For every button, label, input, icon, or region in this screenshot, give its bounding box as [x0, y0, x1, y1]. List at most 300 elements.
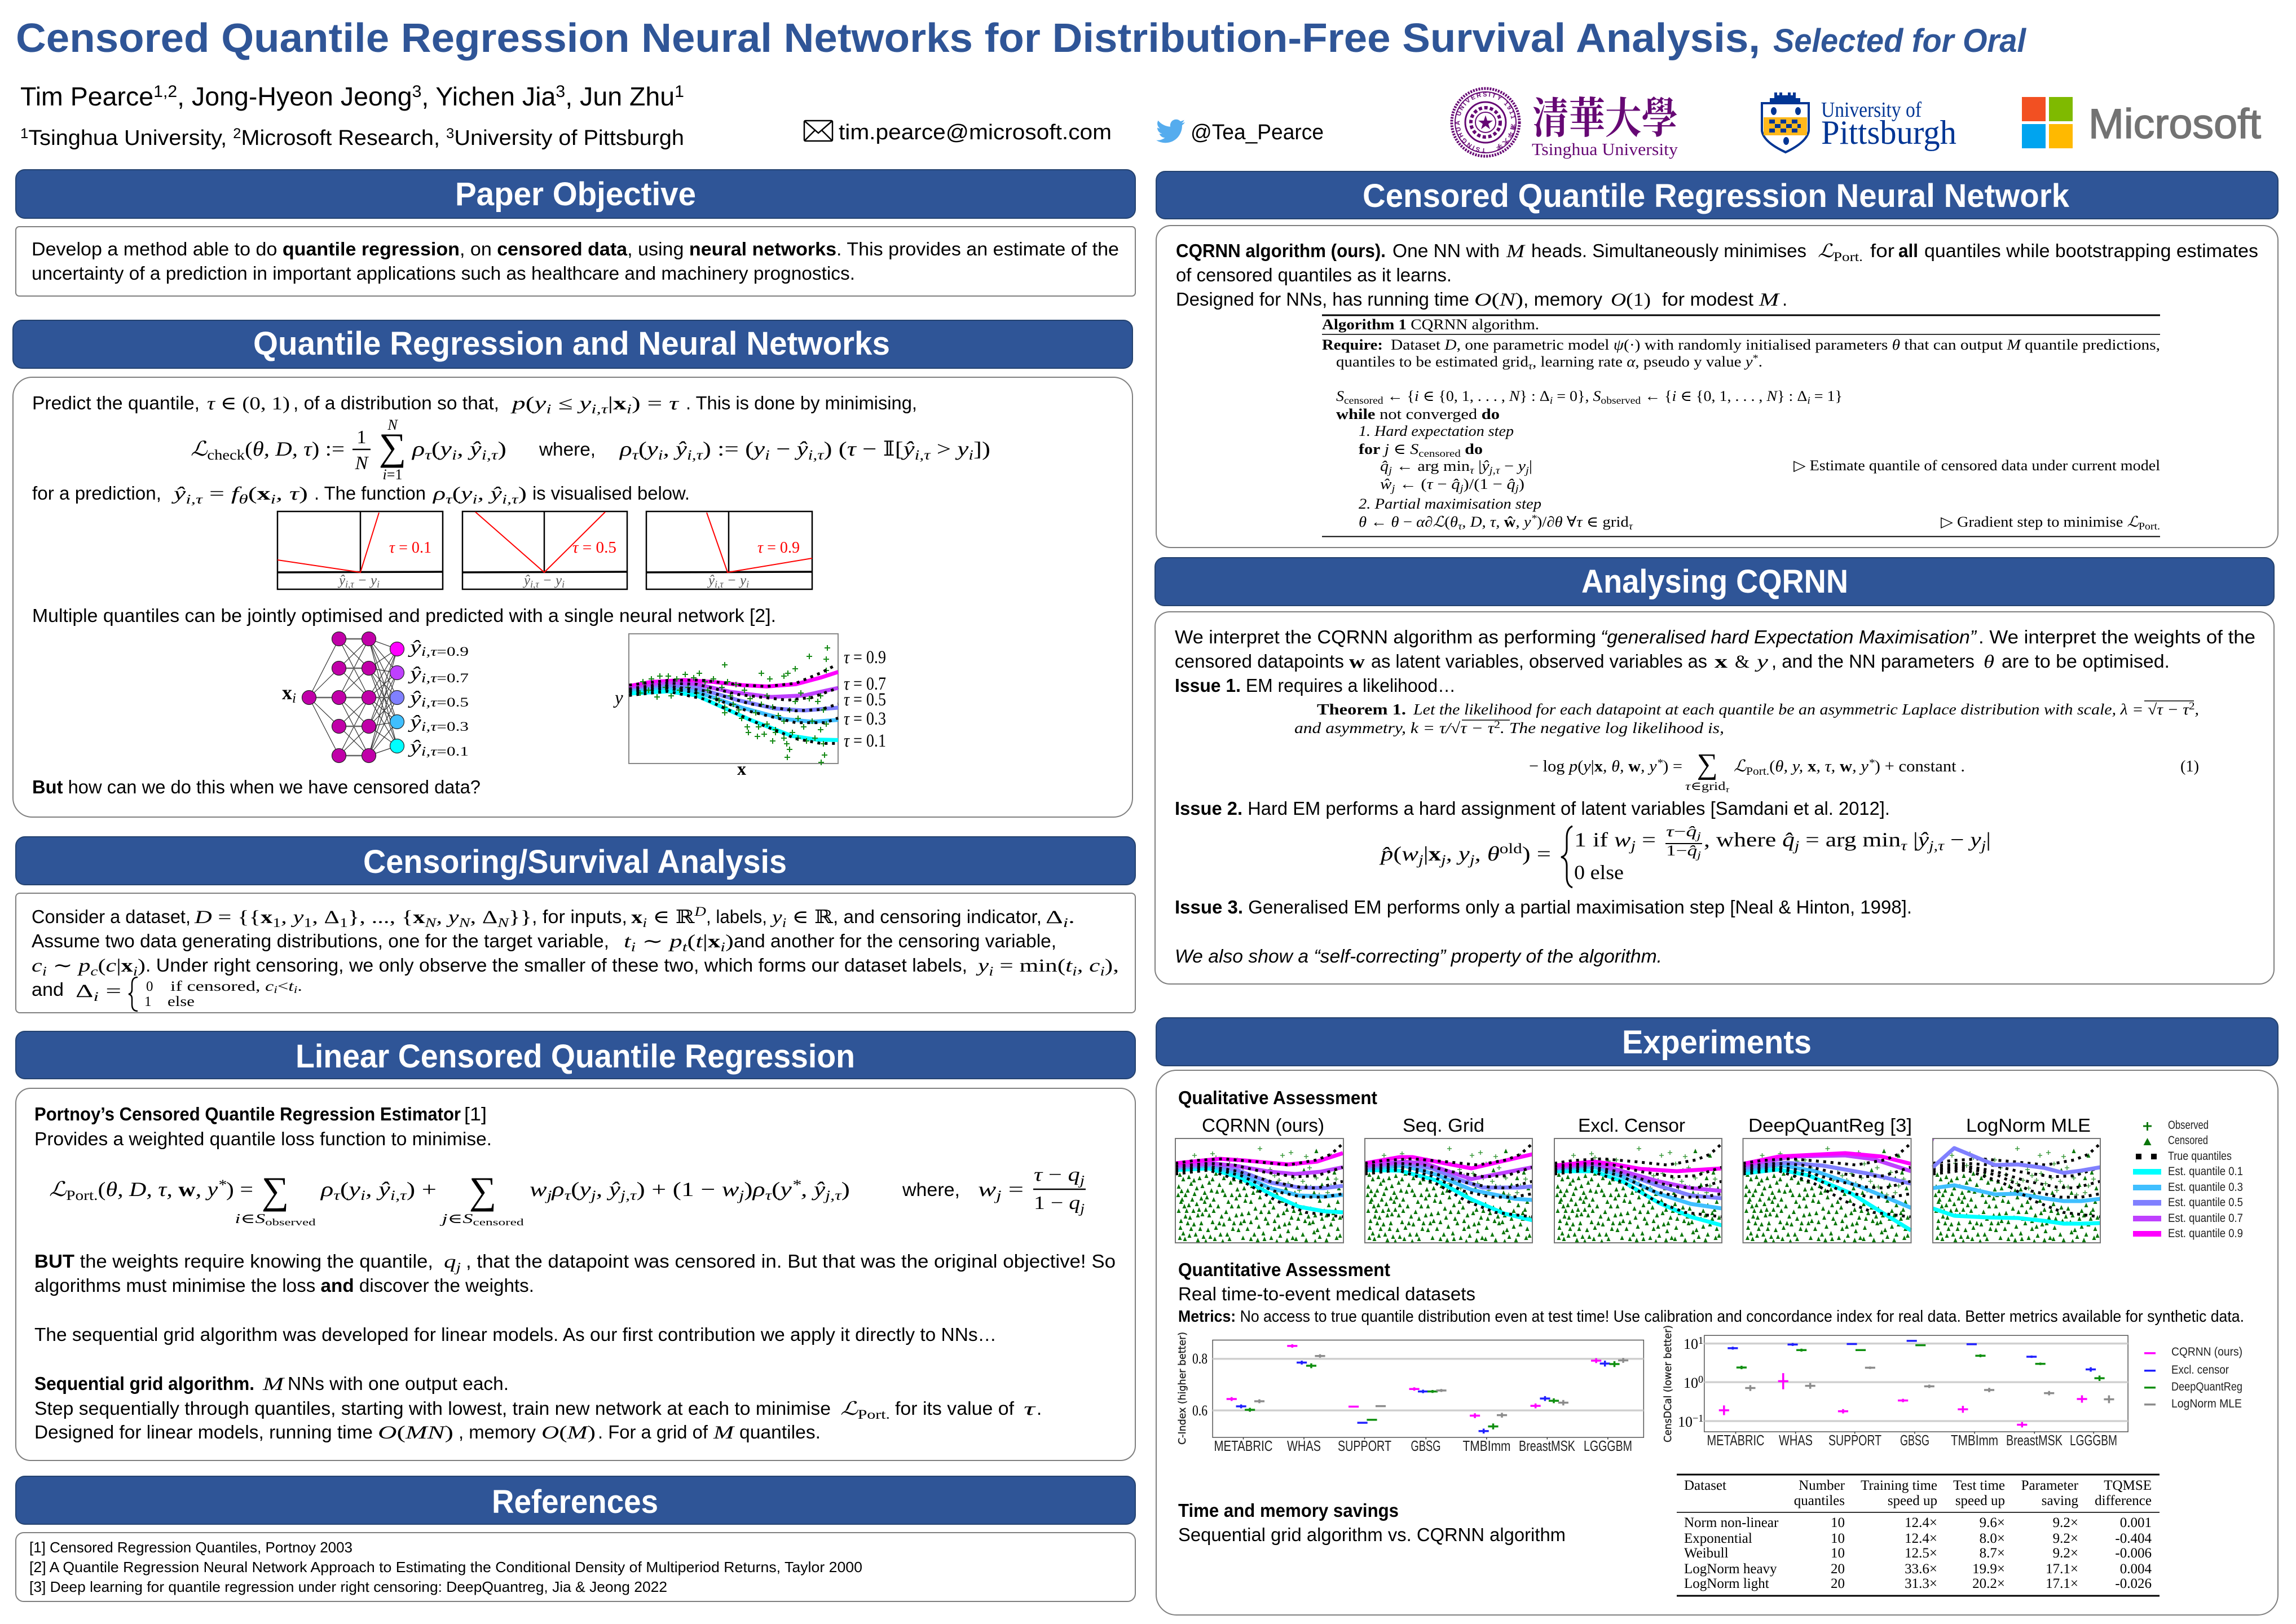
- text: EM interpretation: “generalised hard Expectation Maximisation”: [1601, 626, 1977, 647]
- algorithm box: ): [1519, 476, 1524, 492]
- algorithm box: i ∈ {0, 1, . . . , N} : Δ: [1672, 388, 1805, 404]
- equation: Portnoy loss: w: [722, 1178, 735, 1201]
- text: EM interpretation: w: [1349, 652, 1365, 672]
- equation: hard assignment: old: [1500, 841, 1522, 857]
- text: dataset definition: i: [94, 989, 99, 1004]
- panel: censoring: [16, 893, 1135, 1013]
- text: theorem: 2: [2189, 700, 2195, 712]
- table header: Training time: [1861, 1478, 1937, 1493]
- table rows: 9.6×: [1980, 1515, 2005, 1530]
- algorithm box: α, pseudo y value y: [1627, 354, 1752, 370]
- text: dataset definition: i: [1072, 964, 1077, 978]
- diagram: neural network: =0.1: [437, 744, 469, 758]
- equation: check loss: τ: [425, 448, 432, 463]
- equation: negative log likelihood: (: [1769, 757, 1775, 775]
- diagram: neural network: =0.5: [437, 695, 469, 709]
- text: dataset definition: [32, 904, 1119, 1011]
- text: real datasets: Real time-to-event medical datasets: [1178, 1283, 1475, 1304]
- equation: negative log likelihood: *: [1657, 757, 1663, 769]
- text: CQRNN description: all: [1898, 240, 1918, 261]
- text: dataset definition: t: [1065, 956, 1070, 976]
- text: EM interpretation: censored datapoints: [1175, 651, 1344, 672]
- equation: check loss: i: [765, 448, 770, 463]
- table header: Test time: [1953, 1478, 2005, 1493]
- table rows: 12.4×: [1905, 1531, 1937, 1546]
- text: for a prediction: . The function: [314, 483, 426, 504]
- logo: University of Pittsburgh: [1762, 92, 1956, 152]
- equation: hard assignment: y: [1970, 828, 1979, 851]
- text: EM interpretation: [1175, 626, 2255, 672]
- algorithm box: ▷ Estimate quantile of censored data under current model: [1793, 457, 2160, 474]
- table rows: 17.1×: [2046, 1561, 2078, 1577]
- legend: quantitative charts: [2144, 1345, 2242, 1410]
- text: predict the quantile: i: [627, 401, 632, 416]
- equation: Portnoy loss: y: [780, 1178, 789, 1201]
- text: CQRNN description: [1176, 240, 2258, 310]
- affiliations: Microsoft Research,: [241, 126, 446, 150]
- chart: quantile curves: τ = 0.3: [844, 709, 886, 729]
- authors: 3: [412, 82, 421, 101]
- table header: speed up: [1888, 1493, 1937, 1508]
- equation: check loss: ρ: [412, 438, 422, 460]
- equation: Portnoy loss: j: [737, 1188, 744, 1203]
- text: EM interpretation: , and the NN parameters: [1771, 651, 1975, 672]
- algorithm box: ← (: [1395, 476, 1427, 492]
- text: dataset definition: , Δ: [312, 907, 340, 928]
- panel: paper objective: [16, 227, 1135, 296]
- algorithm box: j: [1458, 483, 1464, 494]
- chart: Seq. Grid qualitative: [1365, 1138, 1532, 1243]
- text: CQRNN description: heads. Simultaneously minimises: [1531, 240, 1806, 261]
- text: dataset definition: i: [1063, 915, 1068, 930]
- heading: Experiments: Experiments: [1622, 1024, 1812, 1061]
- equation: Portnoy loss: i,τ: [390, 1188, 407, 1203]
- text: but the weights: algorithms must minimise the loss and discover the weights.: [34, 1275, 534, 1296]
- text: CQRNN description: , memory: [1523, 289, 1603, 310]
- equation: check loss: i: [968, 448, 973, 463]
- text: dataset definition: if censored, c: [170, 979, 271, 994]
- diagram: neural network: =0.9: [437, 644, 469, 659]
- algorithm box: censored: [1344, 395, 1383, 406]
- equation: Portnoy loss: 1 − q: [1034, 1193, 1078, 1213]
- table: synthetic results: [1677, 1475, 2160, 1596]
- text: but how: But how can we do this when we have censored data?: [32, 776, 481, 797]
- algorithm box: = 1}: [1810, 388, 1843, 404]
- algorithm box: ▷ Gradient step to minimise ℒ: [1941, 514, 2138, 531]
- panel: analysing CQRNN: [1155, 612, 2274, 984]
- text: dataset definition: 1: [340, 915, 348, 930]
- text: CQRNN description: M: [1759, 290, 1780, 310]
- text: EM interpretation: y: [1755, 652, 1768, 672]
- text: CQRNN description: quantiles while bootstrapping estimates: [1924, 240, 2258, 261]
- plot titles: CQRNN (ours): [1202, 1115, 1324, 1136]
- text: predict the quantile: . This is done by minimising,: [686, 392, 917, 413]
- chart: CensDCal: 1: [1698, 1335, 1703, 1346]
- text: self-correcting: We also show a “self-correcting” property of the algorithm.: [1175, 946, 1662, 967]
- equation: check loss: ℒ: [191, 438, 208, 461]
- text: dataset definition: , for inputs,: [532, 906, 627, 927]
- chart: C-index: BreastMSK: [1519, 1437, 1575, 1454]
- text: for a prediction: θ: [239, 492, 248, 506]
- equation: check loss: N: [387, 417, 398, 433]
- affiliations: Tsinghua University,: [28, 126, 233, 150]
- authors: 1,2: [153, 82, 177, 101]
- equation: check loss: [191, 417, 990, 483]
- equation: Portnoy loss: where,: [902, 1179, 960, 1200]
- text: theorem: ,: [2195, 701, 2199, 718]
- chart: CensDCal: CensDCal (lower better): [1662, 1325, 1674, 1442]
- text: for a prediction: (: [248, 484, 257, 504]
- equation: Portnoy loss: y: [579, 1178, 588, 1201]
- text: dataset definition: i: [989, 964, 994, 978]
- chart: CensDCal: WHAS: [1779, 1432, 1813, 1449]
- text: dataset definition: t: [682, 939, 688, 954]
- authors: , Yichen Jia: [421, 82, 556, 111]
- text: dataset definition: ∈ ℝ: [786, 907, 834, 928]
- algorithm box: .: [1759, 354, 1762, 370]
- equation: negative log likelihood: τ∈grid: [1685, 779, 1718, 793]
- equation: check loss: ŷ: [797, 438, 806, 460]
- text: dataset definition: N: [424, 915, 438, 930]
- legend: qualitative plots: True quantiles: [2168, 1150, 2232, 1163]
- plot titles: DeepQuantReg [3]: [1748, 1115, 1912, 1136]
- algorithm box: ŵ, y: [1504, 514, 1530, 530]
- text: dataset definition: c: [90, 964, 98, 978]
- text: sequential grid algorithm: τ: [1024, 1399, 1036, 1419]
- equation: check loss: ∑: [379, 425, 406, 468]
- table rows: 31.3×: [1905, 1576, 1937, 1591]
- text: dataset definition: Δ: [1046, 907, 1063, 928]
- algorithm box: −: [1500, 458, 1518, 474]
- chart: Excl. Censor qualitative: [1554, 1138, 1722, 1243]
- equation: hard assignment: 0 else: [1574, 861, 1624, 884]
- algorithm box: j,τ: [1488, 465, 1501, 476]
- equation: Portnoy loss: j,τ: [618, 1188, 637, 1203]
- text: predict the quantile: ) =: [632, 394, 669, 414]
- chart: check function tau 0.9: τ = 0.9: [757, 539, 800, 557]
- equation: Portnoy loss: ρ: [551, 1178, 565, 1201]
- equation: Portnoy loss: j: [1078, 1173, 1085, 1188]
- equation: check loss: ) := (: [703, 438, 753, 460]
- equation: negative log likelihood: ∑: [1696, 748, 1718, 780]
- seal: ★: [1477, 112, 1494, 134]
- title: Censored Quantile Regression Neural Networks for Distribution-Free Survival Analysis,: [16, 16, 1760, 61]
- chart: check function tau 0.5: i,τ: [530, 579, 539, 590]
- text: theorem: [1294, 700, 2199, 736]
- equation: Portnoy loss: *: [218, 1177, 226, 1193]
- text: dataset definition: .: [1068, 907, 1075, 928]
- text: CQRNN description: Designed for NNs, has running time: [1176, 289, 1469, 310]
- algorithm box: Algorithm 1 CQRNN algorithm.: [1322, 316, 1539, 333]
- panel: experiments: [1156, 1070, 2278, 1615]
- chart: quantile curves: y: [613, 688, 623, 708]
- equation: check loss: (: [638, 438, 647, 460]
- equation: check loss: ) (: [824, 438, 847, 460]
- algorithm box: q̂: [1380, 458, 1387, 474]
- equation: Portnoy loss: ρ: [321, 1178, 330, 1201]
- heading: Censored Quantile Regression Neural Network: [1156, 171, 2278, 219]
- algorithm box: *: [1753, 352, 1759, 364]
- text: dataset definition: i: [294, 984, 298, 995]
- text: dataset definition: c|x: [106, 956, 130, 976]
- text: dataset definition: i: [274, 984, 277, 995]
- equation: Portnoy loss: τ: [333, 1188, 341, 1203]
- algorithm box: )/(1 −: [1464, 476, 1506, 492]
- text: dataset definition: N: [497, 915, 510, 930]
- authors: , Jong-Hyeon Jeong: [177, 82, 412, 111]
- seal: TSINGHUA UNIVERSITY 1911 清华大学: [1456, 92, 1517, 152]
- chart: check function tau 0.9: ŷ: [708, 573, 715, 588]
- text: for a prediction: τ: [446, 492, 453, 506]
- equation: check loss: (: [245, 438, 253, 460]
- text: theorem: . The negative log likelihood is,: [1500, 720, 1724, 736]
- algorithm box: do: [1465, 441, 1483, 457]
- equation: hard assignment: |: [1907, 828, 1918, 851]
- equation: Portnoy loss: ∑: [262, 1169, 289, 1212]
- diagram: neural network: ŷ: [410, 637, 418, 657]
- chart: CensDCal: −1: [1693, 1413, 1703, 1424]
- legend: qualitative plots: Est. quantile 0.5: [2168, 1196, 2243, 1209]
- text: dataset definition: t: [288, 979, 294, 994]
- legend: qualitative plots: Censored: [2168, 1134, 2208, 1147]
- text: dataset definition: Consider a dataset,: [32, 906, 191, 927]
- equation: Portnoy loss: =: [1002, 1178, 1024, 1201]
- equation: check loss: ρ: [620, 438, 629, 460]
- chart: check function tau 0.9: − y: [724, 573, 747, 588]
- equation: Portnoy loss: (: [571, 1178, 579, 1201]
- chart: CensDCal: TMBImm: [1951, 1432, 1998, 1449]
- affiliations: 1: [20, 126, 28, 142]
- text: CQRNN description: for: [1870, 240, 1894, 261]
- equation: negative log likelihood: [1529, 748, 2199, 795]
- equation: negative log likelihood: − log p(y|x, θ, w, y: [1529, 757, 1656, 775]
- equation: Portnoy loss: , ŷ: [365, 1178, 390, 1201]
- heading: Quantile Regression and Neural Networks: Quantile Regression and Neural Networks: [253, 325, 890, 362]
- icon: twitter bird: [1156, 120, 1185, 143]
- text: reference list: [29, 1539, 862, 1595]
- diagram: neural network: i,τ: [421, 719, 437, 734]
- text: dataset definition: ∈ ℝ: [647, 907, 695, 928]
- diagram: neural network: =0.7: [437, 670, 469, 685]
- equation: Portnoy loss: [49, 1164, 1086, 1228]
- equation: negative log likelihood: ℒ: [1734, 756, 1747, 775]
- text: theorem: and asymmetry, k = τ/√τ − τ: [1294, 720, 1465, 736]
- algorithm box: τ: [1528, 360, 1533, 372]
- heading: References: [16, 1476, 1135, 1524]
- chart: CensDCal: SUPPORT: [1828, 1432, 1881, 1449]
- table rows: 0.001: [2120, 1515, 2152, 1530]
- text: dataset definition: t|x: [695, 932, 717, 952]
- table rows: 9.2×: [2053, 1515, 2078, 1530]
- text: dataset definition: . Under right censoring, we only observe the smaller of these two, which forms our dataset labels,: [146, 955, 967, 976]
- text: CQRNN description: M: [1506, 241, 1526, 262]
- chart: C-index: TMBImm: [1463, 1437, 1510, 1454]
- text: predict the quantile: i: [546, 401, 552, 416]
- heading: Linear Censored Quantile Regression: Linear Censored Quantile Regression: [296, 1038, 855, 1075]
- equation: Portnoy loss: θ, D, τ, w, y: [105, 1178, 215, 1201]
- chart: CQRNN qualitative: [1175, 1138, 1343, 1243]
- algorithm box: τ: [1470, 465, 1475, 476]
- equation: negative log likelihood: ) =: [1663, 757, 1682, 775]
- equation: hard assignment: j: [1629, 839, 1636, 854]
- table rows: Norm non-linear: [1684, 1515, 1779, 1530]
- equation: hard assignment: j: [1695, 849, 1701, 860]
- equation: hard assignment: j: [1439, 853, 1446, 868]
- table rows: -0.006: [2115, 1546, 2152, 1561]
- equation: Portnoy loss: j: [589, 1188, 596, 1203]
- algorithm box: ŵ: [1380, 476, 1390, 492]
- table rows: Weibull: [1684, 1546, 1729, 1561]
- chart: check function tau 0.5: ŷ: [524, 573, 530, 588]
- algorithm box: i: [1550, 395, 1553, 406]
- diagram: neural network: i,τ: [421, 695, 437, 709]
- heading: Analysing CQRNN: Analysing CQRNN: [1581, 563, 1848, 600]
- equation: Portnoy loss: censored: [473, 1217, 524, 1228]
- text: dataset definition: , and censoring indicator,: [833, 906, 1042, 927]
- algorithm box: 1. Hard expectation step: [1359, 423, 1514, 439]
- text: issue 1: Issue 1. EM requires a likelihood…: [1175, 675, 1456, 696]
- equation: negative log likelihood: *: [1868, 757, 1875, 769]
- equation: Portnoy loss: (: [340, 1178, 349, 1201]
- chart: LogNorm MLE qualitative: [1933, 1138, 2100, 1243]
- text: issue 2: Issue 2. Hard EM performs a hard assignment of latent variables [Samdani et al. 2012].: [1175, 798, 1890, 819]
- legend: quantitative charts: Excl. censor: [2171, 1363, 2229, 1376]
- equation: Portnoy loss: , ŷ: [801, 1178, 825, 1201]
- text: objective: [32, 239, 1119, 284]
- algorithm box: ← {: [1383, 388, 1414, 404]
- equation: check loss: τ − 𝕀[ ŷ: [847, 438, 913, 460]
- text: dataset definition: i: [631, 939, 636, 954]
- text: dataset definition: ∼: [47, 956, 78, 976]
- chart: CensDCal: 0: [1698, 1374, 1703, 1385]
- equation: hard assignment: p̂(w: [1381, 842, 1415, 865]
- equation: check loss: i=1: [383, 466, 402, 483]
- text: predict the quantile: ≤ y: [552, 394, 592, 414]
- text: dataset definition: and: [32, 979, 64, 1000]
- text: sequential grid algorithm: .: [1037, 1398, 1042, 1419]
- text: EM interpretation: . We interpret the weights of the: [1978, 626, 2255, 647]
- text: dataset definition: y: [772, 907, 781, 928]
- text: sequential grid algorithm: M: [262, 1374, 285, 1394]
- table rows: 19.9×: [1972, 1561, 2005, 1577]
- text: but the weights: j: [454, 1260, 461, 1274]
- text: dataset definition: , y: [281, 907, 304, 928]
- text: dataset definition: x: [631, 907, 643, 928]
- equation: hard assignment: j: [1467, 853, 1475, 868]
- chart: CensDCal: GBSG: [1900, 1432, 1929, 1449]
- table rows: 10: [1831, 1515, 1845, 1530]
- table header: Parameter: [2021, 1478, 2079, 1493]
- icon: envelope: [804, 121, 832, 141]
- heading: Linear Censored Quantile Regression: [16, 1031, 1135, 1079]
- diagram: neural network: [282, 632, 469, 762]
- equation: check loss: , ŷ: [457, 438, 482, 460]
- text: sequential grid algorithm: quantiles.: [739, 1422, 821, 1442]
- equation: Portnoy loss: (: [772, 1178, 780, 1201]
- text: theorem: Theorem 1.: [1317, 701, 1406, 718]
- authors: 1: [675, 82, 684, 101]
- text: dataset definition: 1: [303, 915, 312, 930]
- table header: speed up: [1955, 1493, 2005, 1508]
- algorithm box: |: [1529, 458, 1532, 474]
- chart: quantile curves: τ = 0.1: [844, 731, 886, 751]
- table header: quantiles: [1794, 1493, 1845, 1508]
- equation: Portnoy loss: i: [360, 1188, 365, 1203]
- table rows: 9.2×: [2053, 1531, 2078, 1546]
- text: CQRNN description: for modest: [1662, 289, 1753, 310]
- text: EM interpretation: We interpret the CQRNN algorithm as performing: [1175, 626, 1596, 647]
- algorithm box: τ: [1458, 520, 1463, 532]
- equation: hard assignment: =: [1636, 828, 1656, 851]
- legend: quantitative charts: DeepQuantReg: [2171, 1380, 2242, 1393]
- chart: check function tau 0.9: i,τ: [715, 579, 724, 590]
- chart: check function tau 0.9: i: [746, 579, 749, 590]
- chart: C-index: GBSG: [1411, 1437, 1440, 1454]
- text: dataset definition: =: [99, 981, 121, 1001]
- text: dataset definition: i: [782, 915, 786, 930]
- text: EM interpretation: θ: [1984, 652, 1994, 672]
- table rows: [1684, 1515, 2152, 1591]
- equation: hard assignment: , y: [1446, 842, 1470, 865]
- algorithm box: θ ← θ − α∂ℒ(θ: [1359, 514, 1457, 531]
- algorithm box: quantiles to be estimated grid: [1336, 354, 1509, 370]
- email: tim.pearce@microsoft.com: [839, 121, 1112, 144]
- plot titles: Seq. Grid: [1403, 1115, 1484, 1136]
- algorithm box: j: [1390, 483, 1395, 494]
- text: dataset definition: and another for the censoring variable,: [734, 930, 1056, 951]
- table rows: -0.026: [2115, 1576, 2152, 1591]
- authors: Tim Pearce: [20, 82, 152, 111]
- table rows: 20: [1831, 1561, 1845, 1577]
- equation: Portnoy loss: w: [530, 1178, 543, 1201]
- equation: check loss: 1: [356, 427, 367, 448]
- algorithm box: )/∂: [1537, 514, 1555, 530]
- equation: hard assignment: j: [1416, 853, 1424, 868]
- equation: check loss: >: [930, 438, 957, 460]
- chart: check function tau 0.5: τ = 0.5: [572, 539, 616, 557]
- text: reference list: [2] A Quantile Regression Neural Network Approach to Estimating the Conditional Density of Multiperiod Returns, Taylor 2000: [29, 1559, 862, 1576]
- table header: difference: [2095, 1493, 2152, 1508]
- text: sequential grid intro: The sequential grid algorithm was developed for linear models. As our first contribution we apply it directly to NNs…: [34, 1324, 997, 1345]
- text: dataset definition: (: [98, 956, 106, 976]
- text: predict the quantile: i,τ: [591, 401, 609, 416]
- text: predict the quantile: |: [608, 394, 613, 414]
- text: dataset definition: i: [133, 964, 138, 978]
- text: dataset definition: 0: [146, 979, 153, 994]
- chart: CensDCal: 10: [1678, 1414, 1693, 1430]
- text: for a prediction: (: [452, 484, 461, 504]
- heading: References: References: [492, 1484, 658, 1520]
- algorithm box: ŷ: [1482, 458, 1488, 474]
- equation: Portnoy loss: ℒ: [49, 1178, 67, 1201]
- equation: Portnoy loss: *: [792, 1177, 801, 1193]
- table rows: 10: [1831, 1546, 1845, 1561]
- text: dataset definition: <: [277, 979, 288, 994]
- text: sequential grid algorithm: Step sequentially through quantiles, starting with lowest, train new network at each to minimise: [34, 1398, 831, 1419]
- chart: quantile curves: τ = 0.5: [844, 690, 886, 710]
- text: time and memory savings: Sequential grid algorithm vs. CQRNN algorithm: [1178, 1524, 1566, 1545]
- chart: CensDCal: BreastMSK: [2006, 1432, 2063, 1449]
- text: dataset definition: , Δ: [470, 907, 497, 928]
- text: for a prediction: x: [257, 484, 271, 504]
- legend: qualitative plots: Est. quantile 0.3: [2168, 1181, 2243, 1194]
- diagram: neural network: ŷ: [410, 712, 418, 732]
- plot titles: [1202, 1115, 2091, 1136]
- chart: quantile curves: [613, 634, 886, 779]
- table rows: 12.4×: [1905, 1515, 1937, 1530]
- table header: [1684, 1478, 2152, 1508]
- chart: CensDCal: 10: [1684, 1336, 1698, 1352]
